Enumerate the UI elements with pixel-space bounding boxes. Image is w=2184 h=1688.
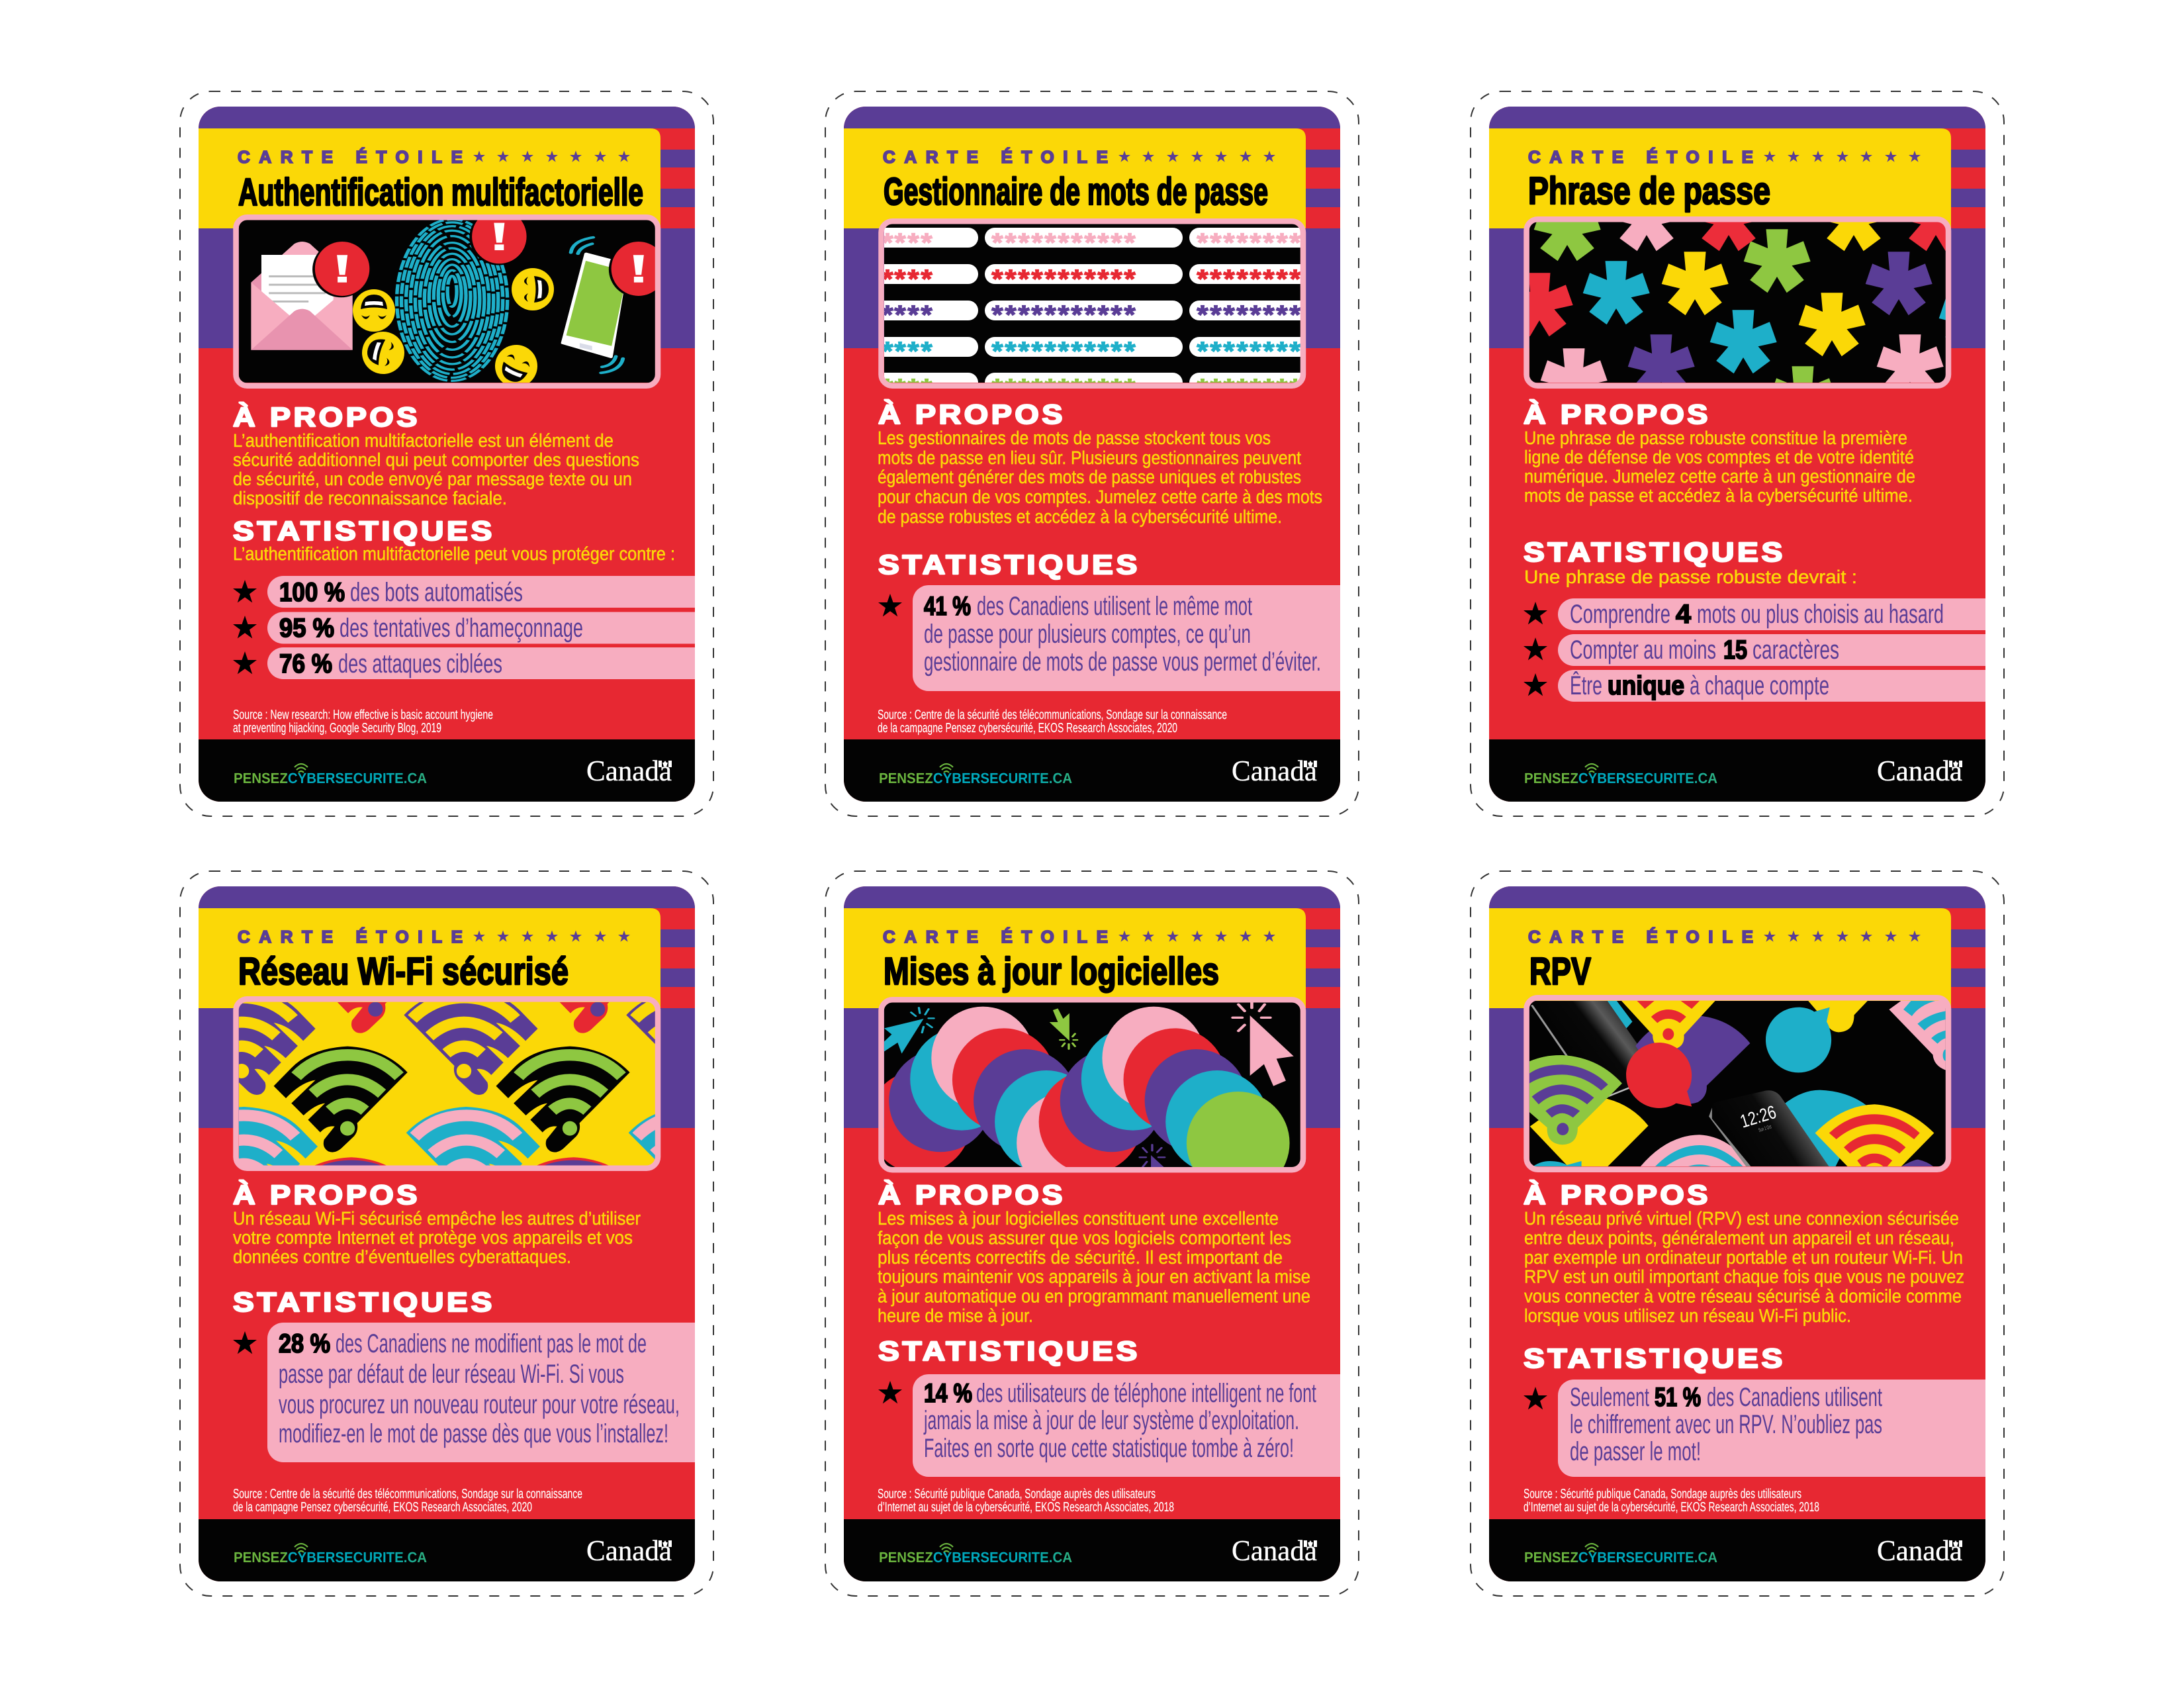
kicker: carte étoile: CARTE ÉTOILE xyxy=(883,147,1108,167)
stat callout: Faites en sorte que cette statistique tombe à zéro! xyxy=(924,1434,1294,1463)
about text: Un réseau privé virtuel (RPV) est une connexion sécurisée xyxy=(1524,1208,1959,1229)
stat list: unique xyxy=(1608,671,1684,700)
stat list: caractères xyxy=(1752,635,1839,665)
about text: entre deux points, généralement un appareil et un réseau, xyxy=(1524,1227,1954,1248)
stat callout: 51 % xyxy=(1655,1383,1701,1412)
about text: Un réseau Wi-Fi sécurisé empêche les autres d’utiliser xyxy=(233,1208,641,1229)
stat callout xyxy=(878,585,1340,691)
source: Source : Centre de la sécurité des télécommunications, Sondage sur la connaissance xyxy=(878,708,1227,722)
source: Source : Sécurité publique Canada, Sondage auprès des utilisateurs xyxy=(1524,1487,1801,1501)
website url: PENSEZCYBERSECURITE.CA xyxy=(234,770,427,786)
source: de la campagne Pensez cybersécurité, EKOS Research Associates, 2020 xyxy=(233,1500,532,1515)
stat list: à chaque compte xyxy=(1690,671,1829,700)
about text xyxy=(1524,1208,1964,1326)
about text: données contre d’éventuelles cyberattaques. xyxy=(233,1246,571,1267)
stat callout: des Canadiens ne modifient pas le mot de xyxy=(336,1329,647,1358)
image frame xyxy=(1526,219,1948,386)
about text: sécurité additionnel qui peut comporter des questions xyxy=(233,449,639,470)
card base with stripes and dashed cut line xyxy=(180,91,713,816)
source xyxy=(878,1487,1174,1515)
heading: à propos: À PROPOS xyxy=(878,1180,1066,1210)
about text: également générer des mots de passe uniques et robustes xyxy=(878,467,1301,487)
about text xyxy=(878,428,1322,527)
about text: plus récents correctifs de sécurité. Il est important de xyxy=(878,1247,1283,1268)
about text: heure de mise à jour. xyxy=(878,1305,1033,1326)
illustration: coloured asterisks xyxy=(1529,222,1946,383)
heading: à propos: À PROPOS xyxy=(233,402,420,432)
heading: à propos: À PROPOS xyxy=(1524,1180,1711,1210)
title: Authentification multifactorielle xyxy=(238,171,643,214)
heading: statistiques: STATISTIQUES xyxy=(233,1287,495,1317)
heading: statistiques: STATISTIQUES xyxy=(1524,537,1786,567)
stat list: des bots automatisés xyxy=(350,578,523,607)
title: Réseau Wi-Fi sécurisé xyxy=(238,950,569,993)
kicker: carte étoile: CARTE ÉTOILE xyxy=(1528,927,1753,947)
stat callout: de passer le mot! xyxy=(1570,1437,1701,1466)
title: Phrase de passe xyxy=(1528,169,1770,212)
website url: PENSEZCYBERSECURITE.CA xyxy=(879,1549,1072,1566)
about text: mots de passe et accédez à la cybersécurité ultime. xyxy=(1524,485,1913,506)
image frame xyxy=(236,999,658,1168)
about text: RPV est un outil important chaque fois que vous ne pouvez xyxy=(1524,1266,1964,1287)
stat list: des tentatives d’hameçonnage xyxy=(340,614,583,643)
website url: PENSEZCYBERSECURITE.CA xyxy=(234,1549,427,1566)
website url: PENSEZCYBERSECURITE.CA xyxy=(879,770,1072,786)
stat callout: vous procurez un nouveau routeur pour votre réseau, xyxy=(279,1390,680,1419)
stat callout: jamais la mise à jour de leur système d’exploitation. xyxy=(923,1406,1299,1435)
heading: statistiques: STATISTIQUES xyxy=(1524,1343,1786,1374)
stat list: mots ou plus choisis au hasard xyxy=(1697,600,1944,629)
heading: à propos: À PROPOS xyxy=(1524,399,1711,430)
kicker: carte étoile: CARTE ÉTOILE xyxy=(883,927,1108,947)
canada wordmark: Canada xyxy=(1877,1534,1962,1567)
card base with stripes and dashed cut line xyxy=(825,871,1359,1596)
title: Mises à jour logicielles xyxy=(884,950,1219,993)
card: Réseau Wi-Fi sécurisé xyxy=(180,871,762,1596)
about text: Les mises à jour logicielles constituent une excellente xyxy=(878,1208,1279,1229)
phone date: Sun 1 Oct xyxy=(1758,1123,1772,1133)
stat callout: des Canadiens utilisent xyxy=(1707,1383,1882,1412)
about text: par exemple un ordinateur portable et un routeur Wi-Fi. Un xyxy=(1524,1247,1963,1268)
heading: statistiques: STATISTIQUES xyxy=(878,549,1140,580)
title: RPV xyxy=(1529,950,1591,993)
illustration: phones, wi-fi symbols and speech bubbles xyxy=(1529,1000,1948,1168)
statistics intro: L’authentification multifactorielle peut vous protéger contre : xyxy=(233,543,675,564)
about text xyxy=(233,430,639,508)
canada wordmark: Canada xyxy=(586,755,672,787)
stat list: Être xyxy=(1570,671,1602,700)
card base with stripes and dashed cut line xyxy=(825,91,1359,816)
source xyxy=(878,708,1227,735)
canada wordmark: Canada xyxy=(1877,755,1962,787)
about text: ligne de défense de vos comptes et de votre identité xyxy=(1524,447,1914,467)
stat callout xyxy=(878,1374,1340,1477)
about text: L’authentification multifactorielle est un élément de xyxy=(233,430,614,451)
about text: numérique. Jumelez cette carte à un gestionnaire de xyxy=(1524,466,1915,487)
illustration: envelope, fingerprint, phone and alerts xyxy=(239,220,655,383)
stat callout: des utilisateurs de téléphone intelligent ne font xyxy=(976,1379,1316,1408)
stat list: 100 % xyxy=(279,578,345,607)
website url: PENSEZCYBERSECURITE.CA xyxy=(1524,770,1717,786)
image frame xyxy=(882,221,1303,386)
stat callout: 41 % xyxy=(924,592,971,621)
title: Gestionnaire de mots de passe xyxy=(884,170,1268,213)
card base with stripes and dashed cut line xyxy=(1471,871,2004,1596)
stat list: Compter au moins xyxy=(1570,635,1716,665)
phone clock: 12:26 xyxy=(1738,1102,1778,1132)
kicker: carte étoile: CARTE ÉTOILE xyxy=(1528,147,1753,167)
about text: dispositif de reconnaissance faciale. xyxy=(233,488,507,508)
canada wordmark: Canada xyxy=(1232,755,1317,787)
source xyxy=(1524,1487,1819,1515)
image frame xyxy=(236,217,658,386)
about text: à jour automatique ou en programmant manuellement une xyxy=(878,1286,1310,1307)
stat list: Comprendre xyxy=(1570,600,1670,629)
about text: vous connecter à votre réseau sécurisé à domicile comme xyxy=(1524,1286,1962,1307)
stat callout xyxy=(233,1323,695,1462)
card base with stripes and dashed cut line xyxy=(1471,91,2004,816)
source: d’Internet au sujet de la cybersécurité, EKOS Research Associates, 2018 xyxy=(878,1500,1174,1515)
card base with stripes and dashed cut line xyxy=(180,871,713,1596)
card: Authentification multifactorielle xyxy=(180,91,713,816)
stat callout: 28 % xyxy=(279,1329,330,1358)
heading: statistiques: STATISTIQUES xyxy=(233,516,495,546)
about text: pour chacun de vos comptes. Jumelez cette carte à des mots xyxy=(878,487,1322,507)
card: Mises à jour logicielles xyxy=(825,871,1359,1596)
stat list: 4 xyxy=(1676,600,1692,629)
stat callout: passe par défaut de leur réseau Wi-Fi. Si vous xyxy=(279,1360,624,1389)
stat list xyxy=(233,576,695,679)
image frame xyxy=(882,1000,1303,1170)
about text: lorsque vous utilisez un réseau Wi-Fi public. xyxy=(1524,1305,1851,1326)
stat callout: Seulement xyxy=(1570,1383,1649,1412)
illustration: overlapping ovals and cursors xyxy=(884,1002,1300,1167)
about text: façon de vous assurer que vos logiciels comportent les xyxy=(878,1227,1291,1248)
card: Phrase de passe xyxy=(1471,91,2006,816)
stat list: 76 % xyxy=(279,649,332,679)
about text xyxy=(878,1208,1310,1326)
card: Gestionnaire de mots de passe xyxy=(825,91,1361,816)
statistics intro: Une phrase de passe robuste devrait : xyxy=(1524,567,1857,587)
heading: à propos: À PROPOS xyxy=(878,399,1066,430)
card: RPV xyxy=(1471,871,2004,1596)
heading: à propos: À PROPOS xyxy=(233,1180,420,1210)
about text: Les gestionnaires de mots de passe stockent tous vos xyxy=(878,428,1271,448)
stat list: 15 xyxy=(1723,635,1747,665)
stat callout: des Canadiens utilisent le même mot xyxy=(977,592,1252,621)
canada wordmark: Canada xyxy=(586,1534,672,1567)
stat list xyxy=(1524,598,1985,702)
canada wordmark: Canada xyxy=(1232,1534,1317,1567)
source: at preventing hijacking, Google Security Blog, 2019 xyxy=(233,721,441,735)
about text: Une phrase de passe robuste constitue la première xyxy=(1524,428,1907,448)
stat list: 95 % xyxy=(279,614,334,643)
image frame xyxy=(1526,998,1948,1170)
stat callout: gestionnaire de mots de passe vous permet d’éviter. xyxy=(924,647,1321,677)
source xyxy=(233,1487,582,1515)
stat callout: modifiez-en le mot de passe dès que vous l’installez! xyxy=(279,1419,668,1448)
kicker: carte étoile: CARTE ÉTOILE xyxy=(238,927,463,947)
sheet of six cards xyxy=(179,91,2005,1597)
stat callout: le chiffrement avec un RPV. N’oubliez pas xyxy=(1570,1410,1882,1439)
about text: de passe robustes et accédez à la cybersécurité ultime. xyxy=(878,506,1282,527)
stat callout: de passe pour plusieurs comptes, ce qu’un xyxy=(924,620,1251,649)
source: de la campagne Pensez cybersécurité, EKOS Research Associates, 2020 xyxy=(878,721,1177,735)
website url: PENSEZCYBERSECURITE.CA xyxy=(1524,1549,1717,1566)
stat callout xyxy=(1524,1380,1985,1477)
source: Source : Sécurité publique Canada, Sondage auprès des utilisateurs xyxy=(878,1487,1156,1501)
about text: toujours maintenir vos appareils à jour en activant la mise xyxy=(878,1266,1310,1287)
about text xyxy=(1524,428,1915,506)
heading: statistiques: STATISTIQUES xyxy=(878,1336,1140,1366)
source: Source : New research: How effective is basic account hygiene xyxy=(233,708,493,722)
about text xyxy=(233,1208,641,1267)
illustration: password fields xyxy=(884,224,1300,383)
source xyxy=(233,708,493,735)
about text: votre compte Internet et protège vos appareils et vos xyxy=(233,1227,633,1248)
stat callout: 14 % xyxy=(924,1379,972,1408)
source: d’Internet au sujet de la cybersécurité, EKOS Research Associates, 2018 xyxy=(1524,1500,1819,1515)
about text: de sécurité, un code envoyé par message texte ou un xyxy=(233,469,632,489)
source: Source : Centre de la sécurité des télécommunications, Sondage sur la connaissance xyxy=(233,1487,582,1501)
stat list: des attaques ciblées xyxy=(338,649,502,679)
illustration: wi-fi symbols xyxy=(239,1002,655,1165)
about text: mots de passe en lieu sûr. Plusieurs gestionnaires peuvent xyxy=(878,447,1301,468)
kicker: carte étoile: CARTE ÉTOILE xyxy=(238,147,463,167)
